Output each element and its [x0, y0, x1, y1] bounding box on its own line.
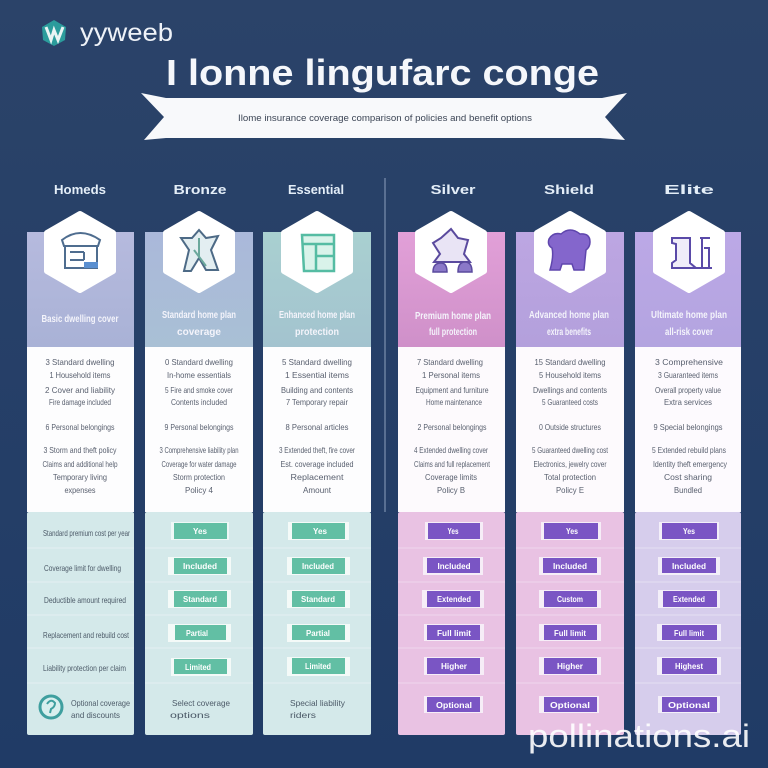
feature list: Claims and additional help: [42, 459, 118, 469]
feature list: 8 Personal articles: [286, 422, 348, 432]
value pills: Full limit: [437, 629, 471, 638]
feature list: [160, 357, 239, 495]
feature list: Building and contents: [281, 385, 353, 395]
banner subtitle: Ilome insurance coverage comparison of policies and benefit options: [238, 113, 532, 124]
feature list: 2 Personal belongings: [418, 422, 486, 432]
column heading: Bronze: [174, 182, 226, 197]
row labels: Replacement and rebuild cost: [43, 630, 129, 640]
value pills: [516, 522, 624, 713]
feature list: Coverage for water damage: [162, 459, 237, 469]
feature list: 5 Household items: [539, 370, 601, 380]
column heading: Shield: [544, 182, 594, 197]
value pills: Higher: [557, 662, 583, 671]
icon: help badge: [40, 696, 62, 718]
value pills: Optional: [550, 701, 590, 710]
footnote: Optional coverage: [71, 698, 130, 708]
feature list: [532, 357, 608, 495]
feature list: Policy E: [556, 485, 584, 495]
value pills: Full limit: [554, 629, 586, 638]
value pills: Yes: [683, 527, 695, 536]
footnote: [290, 698, 346, 720]
column heading: Homeds: [54, 182, 106, 197]
panel: plan 6: [635, 182, 741, 735]
plan summary: full protection: [429, 327, 477, 338]
feature list: Home maintenance: [426, 397, 482, 407]
plan summary: [415, 311, 491, 338]
value pills: Optional: [436, 701, 472, 710]
watermark: pollinations.ai: [528, 718, 750, 754]
feature list: [414, 357, 490, 495]
feature list: 3 Comprehensive liability plan: [160, 445, 239, 455]
feature list: 7 Temporary repair: [286, 397, 348, 407]
feature list: [652, 357, 728, 495]
plan summary: Advanced home plan: [529, 310, 609, 321]
row labels: Deductible amount required: [44, 595, 126, 605]
value pills: Included: [302, 562, 334, 571]
value pills: [145, 522, 253, 683]
feature list: 9 Personal belongings: [164, 422, 234, 432]
plan summary: Basic dwelling cover: [42, 314, 119, 325]
plan summary: protection: [295, 327, 339, 338]
row labels: Standard premium cost per year: [43, 528, 130, 538]
plan summary: all-risk cover: [665, 327, 713, 338]
feature list: 4 Extended dwelling cover: [414, 445, 488, 455]
feature list: Overall property value: [655, 385, 721, 395]
panel: plan 1: [27, 182, 134, 735]
row labels: Liability protection per claim: [43, 663, 126, 673]
feature list: 5 Guaranteed dwelling cost: [532, 445, 608, 455]
plan summary: [279, 310, 355, 338]
feature list: 6 Personal belongings: [46, 422, 114, 432]
feature list: Storm protection: [173, 472, 225, 482]
icon: logo mark: [42, 20, 66, 46]
value pills: Standard: [183, 595, 217, 604]
value pills: Partial: [186, 629, 208, 638]
value pills: Yes: [313, 527, 328, 536]
ribbon banner: [141, 93, 627, 140]
plan summary: Standard home plan: [162, 310, 236, 321]
icon: chef hat: [537, 214, 603, 290]
feature list: 0 Standard dwelling: [165, 357, 233, 367]
footnote: riders: [290, 710, 316, 720]
feature list: Electronics, jewelry cover: [534, 459, 607, 469]
column heading: Essential: [288, 182, 344, 197]
value pills: Yes: [448, 527, 459, 536]
feature list: Contents included: [171, 397, 227, 407]
icon: pillars: [656, 214, 722, 290]
value pills: Optional: [668, 701, 710, 710]
value pills: Yes: [193, 527, 208, 536]
value pills: [398, 522, 505, 713]
feature list: 5 Extended rebuild plans: [652, 445, 726, 455]
value pills: Partial: [306, 629, 330, 638]
value pills: Included: [672, 562, 706, 571]
icon: star figure: [166, 214, 232, 290]
feature list: Replacement: [290, 472, 344, 482]
plan summary: coverage: [177, 327, 221, 338]
feature list: 5 Fire and smoke cover: [165, 385, 233, 395]
value pills: [635, 522, 741, 713]
feature list: Temporary living: [53, 472, 107, 482]
center divider: [384, 178, 386, 512]
feature list: Claims and full replacement: [414, 459, 490, 469]
icon: teal building: [284, 214, 350, 290]
value pills: Included: [438, 562, 471, 571]
value pills: Included: [553, 562, 587, 571]
footnote: Select coverage: [172, 698, 230, 708]
row labels: [27, 528, 134, 683]
value pills: Custom: [557, 595, 583, 604]
icon: pot: [47, 214, 113, 290]
feature list: [279, 357, 355, 495]
feature list: [42, 357, 118, 495]
feature list: 0 Outside structures: [539, 422, 601, 432]
feature list: Amount: [303, 485, 332, 495]
feature list: Bundled: [674, 485, 702, 495]
feature list: 3 Guaranteed items: [658, 370, 718, 380]
feature list: 9 Special belongings: [654, 422, 722, 432]
plan summary: Premium home plan: [415, 311, 491, 322]
title: I lonne lingufarc conge: [166, 52, 599, 93]
plan summary: [529, 310, 609, 338]
column heading: Elite: [664, 182, 714, 197]
feature list: 5 Guaranteed costs: [542, 397, 598, 407]
feature list: 1 Essential items: [285, 370, 349, 380]
icon: bags: [418, 214, 484, 290]
feature list: 5 Standard dwelling: [282, 357, 352, 367]
value pills: Full limit: [674, 629, 704, 638]
footnote: [170, 698, 230, 720]
feature list: Est. coverage included: [280, 459, 354, 469]
feature list: 1 Personal items: [422, 370, 480, 380]
value pills: Limited: [185, 663, 211, 672]
footnote: [71, 698, 130, 720]
feature list: Coverage limits: [425, 472, 477, 482]
feature list: 2 Cover and liability: [45, 385, 116, 395]
value pills: [263, 522, 371, 683]
feature list: 3 Comprehensive: [655, 357, 723, 367]
feature list: Total protection: [544, 472, 596, 482]
feature list: Policy B: [437, 485, 465, 495]
column heading: Silver: [430, 182, 476, 197]
value pills: Standard: [301, 595, 335, 604]
value pills: Extended: [673, 595, 705, 604]
logo: [42, 19, 173, 47]
feature list: 7 Standard dwelling: [417, 357, 483, 367]
feature list: Dwellings and contents: [533, 385, 607, 395]
value pills: Limited: [305, 662, 331, 671]
plan summary: extra benefits: [547, 327, 591, 338]
feature list: Equipment and furniture: [416, 385, 489, 395]
plan summary: [651, 310, 727, 338]
feature list: Policy 4: [185, 485, 213, 495]
footnote: Special liability: [290, 698, 346, 708]
value pills: Higher: [441, 662, 467, 671]
footnote: and discounts: [71, 710, 120, 720]
feature list: Fire damage included: [49, 397, 111, 407]
footnote: options: [170, 710, 210, 720]
feature list: Cost sharing: [664, 472, 712, 482]
feature list: 3 Standard dwelling: [46, 357, 115, 367]
feature list: Identity theft emergency: [653, 459, 728, 469]
panel: plan 4: [398, 182, 505, 735]
value pills: Yes: [566, 527, 578, 536]
feature list: expenses: [64, 485, 96, 495]
value pills: Included: [183, 562, 217, 571]
plan summary: Enhanced home plan: [279, 310, 355, 321]
feature list: 3 Storm and theft policy: [44, 445, 117, 455]
value pills: Highest: [675, 662, 703, 671]
plan summary: [162, 310, 236, 338]
row labels: Coverage limit for dwelling: [44, 563, 121, 573]
panel: plan 5: [516, 182, 624, 735]
logo wordmark: yyweeb: [80, 19, 173, 47]
feature list: 1 Household items: [50, 370, 110, 380]
feature list: Extra services: [664, 397, 712, 407]
panel: plan 3: [263, 182, 371, 735]
value pills: Extended: [437, 595, 471, 604]
feature list: In-home essentials: [167, 370, 231, 380]
feature list: 15 Standard dwelling: [534, 357, 606, 367]
feature list: 3 Extended theft, fire cover: [279, 445, 355, 455]
panel: plan 2: [145, 182, 253, 735]
plan summary: Ultimate home plan: [651, 310, 727, 321]
